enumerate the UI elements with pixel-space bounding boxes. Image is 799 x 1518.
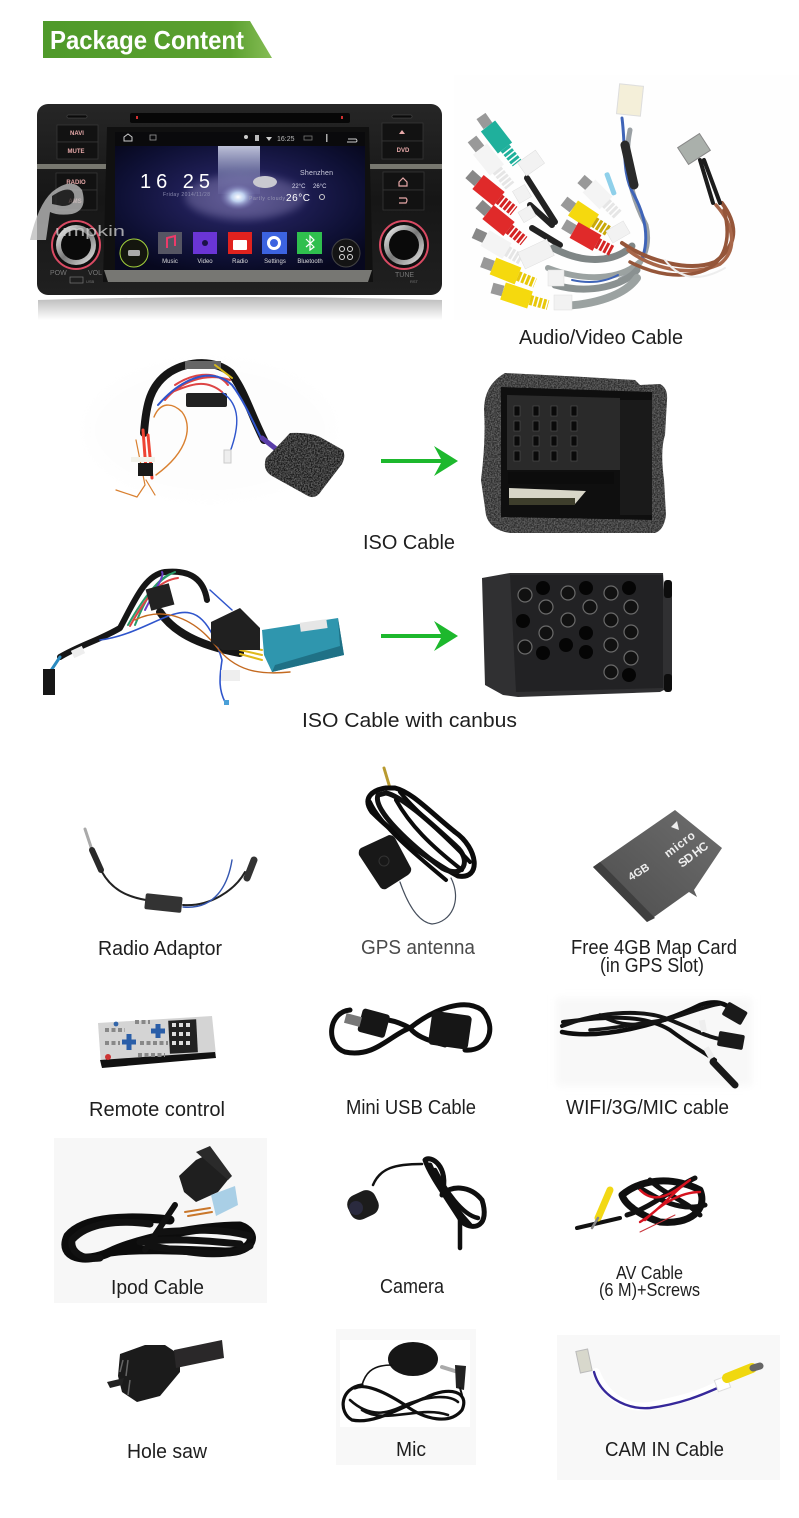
panel print labels: VOL bbox=[88, 270, 102, 277]
connectors bbox=[604, 84, 710, 196]
app icons: Bluetooth bbox=[297, 259, 323, 265]
clock and weather: 26°C bbox=[313, 184, 327, 190]
screen bbox=[115, 146, 365, 270]
unit body bbox=[37, 104, 442, 295]
clock and weather: Partly cloudy bbox=[249, 196, 286, 202]
product photo: micro SD card: micro bbox=[661, 828, 698, 860]
label: Radio Adaptor: Radio Adaptor bbox=[98, 938, 222, 960]
volume knob bbox=[52, 221, 100, 269]
canbus harness wires bbox=[43, 572, 290, 705]
cavity holes bbox=[516, 581, 636, 682]
heading banner: Package Content: Package Content bbox=[50, 25, 244, 55]
panel print labels bbox=[50, 270, 419, 284]
label: Free 4GB Map Card bbox=[571, 937, 737, 977]
label: Mini USB Cable: Mini USB Cable bbox=[346, 1097, 476, 1119]
arrow: canbus cable to plug bbox=[381, 621, 458, 651]
white cable tags bbox=[512, 150, 630, 310]
panel print labels: TUNE bbox=[395, 272, 414, 279]
product photo: micro SD card: SD HC bbox=[675, 839, 711, 870]
label: Free 4GB Map Card: (in GPS Slot) bbox=[600, 955, 704, 977]
panel print labels: USB bbox=[86, 279, 95, 284]
panel print labels: POW bbox=[50, 270, 67, 277]
app icons: Music bbox=[162, 259, 178, 265]
clock and weather bbox=[140, 170, 333, 204]
metal pins bbox=[518, 586, 638, 679]
left buttons: RADIO bbox=[66, 180, 86, 186]
left buttons bbox=[56, 125, 98, 210]
product photo: hole saw bbox=[107, 1340, 224, 1402]
app icons: Video bbox=[197, 259, 213, 265]
left buttons: AMS bbox=[68, 199, 82, 205]
wires bbox=[527, 118, 733, 306]
app icons: Radio bbox=[232, 259, 248, 265]
left buttons: NAVI bbox=[70, 131, 84, 137]
panel: ipod cable bbox=[54, 1138, 267, 1303]
panel: mic bbox=[336, 1329, 476, 1465]
product photo: ipod cable bbox=[66, 1146, 251, 1258]
label: WIFI/3G/MIC cable: WIFI/3G/MIC cable bbox=[566, 1097, 729, 1119]
connector pins bbox=[514, 406, 577, 461]
clock and weather: Shenzhen bbox=[300, 170, 333, 177]
label: Free 4GB Map Card: Free 4GB Map Card bbox=[571, 937, 737, 959]
harness plug bbox=[211, 608, 260, 650]
product photo: micro SD card: 4GB bbox=[626, 861, 652, 884]
label: GPS antenna: GPS antenna bbox=[361, 937, 476, 959]
clock and weather: 16 25 bbox=[140, 171, 210, 193]
product photo: mini USB cable bbox=[332, 1005, 490, 1053]
product photo: micro SD card bbox=[593, 810, 722, 922]
label: Audio/Video Cable: Audio/Video Cable bbox=[519, 327, 683, 349]
disc slot bbox=[67, 113, 412, 123]
label: Hole saw: Hole saw bbox=[127, 1441, 208, 1463]
RCA plugs bbox=[469, 116, 618, 305]
product photo: canbus connector close-up bbox=[482, 573, 672, 697]
product photo: GPS antenna bbox=[359, 768, 474, 924]
clock and weather: 22°C bbox=[292, 184, 306, 190]
loom and wires bbox=[116, 361, 280, 497]
product photo: ISO cable harness bbox=[85, 360, 344, 500]
label: Remote control: Remote control bbox=[89, 1099, 225, 1121]
canbus box bbox=[262, 618, 344, 672]
panel print labels: RST bbox=[410, 279, 419, 284]
product photo: AV cable with screws bbox=[577, 1178, 705, 1232]
clock and weather: 26°C bbox=[286, 193, 310, 204]
product photo: remote control bbox=[98, 1016, 216, 1068]
watermark: Pumpkin logo: umpkin bbox=[55, 223, 125, 240]
label: ISO Cable with canbus: ISO Cable with canbus bbox=[302, 710, 517, 732]
tune knob bbox=[380, 221, 428, 269]
label: AV Cable (6 M)+Screws: AV Cable bbox=[616, 1263, 683, 1283]
product photo: car head unit bbox=[30, 104, 442, 320]
label: Mic: Mic bbox=[396, 1439, 426, 1461]
watermark: Pumpkin logo bbox=[30, 183, 125, 240]
left buttons: MUTE bbox=[68, 149, 84, 155]
app icons: Settings bbox=[264, 259, 286, 265]
app icons bbox=[120, 232, 360, 267]
product photo: radio adaptor bbox=[85, 829, 254, 913]
product photo: microphone bbox=[343, 1342, 466, 1421]
right buttons: DVD bbox=[397, 148, 410, 154]
product photo: ISO cable with canbus bbox=[43, 572, 344, 705]
label: AV Cable (6 M)+Screws: (6 M)+Screws bbox=[599, 1280, 700, 1300]
status bar bbox=[124, 134, 357, 143]
label: ISO Cable: ISO Cable bbox=[363, 532, 455, 554]
panel: CAM IN cable bbox=[557, 1335, 780, 1480]
clock and weather: Friday 2014/11/28 bbox=[163, 192, 210, 198]
foam plug bbox=[265, 433, 344, 497]
product photo: CAM IN cable bbox=[576, 1349, 760, 1408]
product photo: camera bbox=[344, 1159, 484, 1248]
label: Ipod Cable: Ipod Cable bbox=[111, 1277, 204, 1299]
arrow: ISO cable to plug bbox=[381, 446, 458, 476]
product photo: WIFI/3G/MIC cable bbox=[556, 998, 752, 1086]
product photo: ISO connector close-up bbox=[481, 373, 667, 533]
right buttons bbox=[382, 123, 424, 210]
status bar: 16:25 bbox=[277, 136, 295, 143]
reflection under head unit bbox=[38, 297, 442, 320]
product photo: audio/video cable bbox=[454, 75, 799, 320]
label: CAM IN Cable: CAM IN Cable bbox=[605, 1439, 724, 1461]
label: AV Cable (6 M)+Screws bbox=[599, 1263, 700, 1300]
label: Camera: Camera bbox=[380, 1276, 445, 1298]
bezel bbox=[103, 127, 373, 282]
